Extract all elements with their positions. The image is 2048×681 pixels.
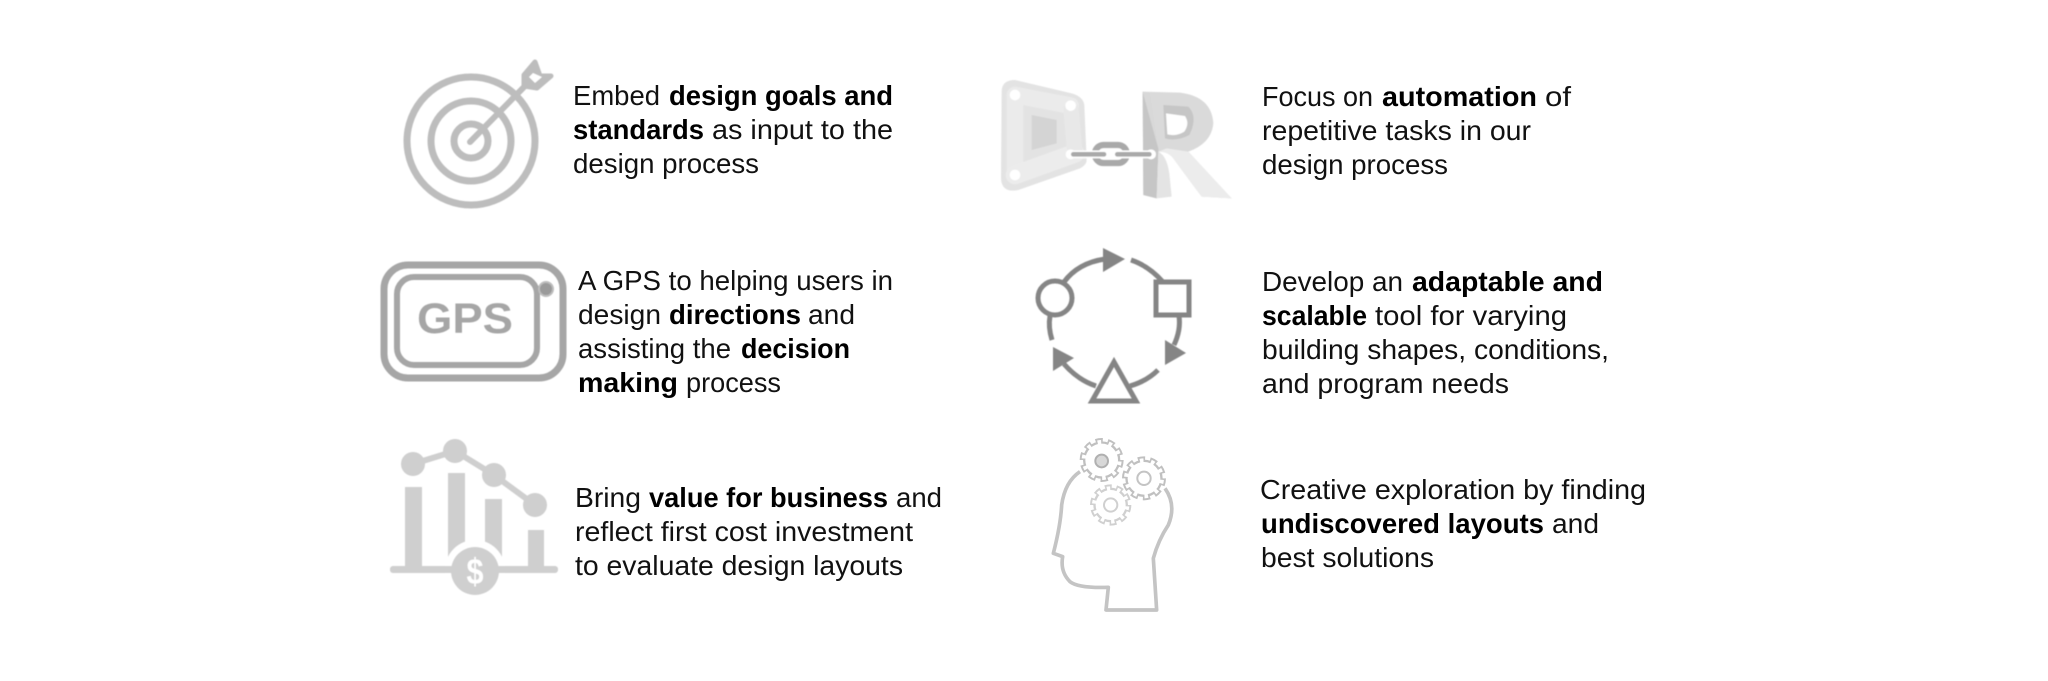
icon: head with gears [1053, 440, 1172, 610]
text: adaptable tool: adaptable and [1412, 266, 1603, 297]
text: adaptable tool: building shapes, conditions, [1262, 334, 1609, 365]
text: design goals: design process [573, 148, 759, 179]
panel: design goals [407, 62, 893, 205]
text: design goals: as input to the [712, 114, 893, 145]
text: design goals [573, 80, 893, 179]
text: adaptable tool [1262, 266, 1609, 399]
text: automation: design process [1262, 149, 1448, 180]
text: business value: and [896, 482, 942, 513]
icon part: right gear [1124, 458, 1164, 498]
text: creative exploration: and [1552, 508, 1599, 539]
text: GPS directions: directions [669, 299, 801, 330]
icon: GPS device [384, 265, 563, 378]
text: business value: to evaluate design layouts [575, 550, 903, 581]
panel: business value [390, 439, 942, 600]
icon part: Dynamo shape [1001, 80, 1087, 191]
text: creative exploration: best solutions [1261, 542, 1434, 573]
text: design goals: standards [573, 114, 704, 145]
text: creative exploration [1260, 474, 1646, 573]
text: adaptable tool: and program needs [1262, 368, 1509, 399]
text: design goals: Embed [573, 80, 660, 111]
text: automation: Focus on [1262, 81, 1373, 112]
text: GPS directions: process [686, 367, 781, 398]
icon part: Revit R [1143, 92, 1232, 198]
text: adaptable tool: scalable [1262, 300, 1367, 331]
icon part: chain link [1066, 145, 1156, 163]
text: creative exploration: Creative exploration by finding [1260, 474, 1646, 505]
text: automation: automation [1382, 81, 1537, 112]
text: business value: reflect first cost investment [575, 516, 913, 547]
icon part: top gear [1082, 440, 1122, 480]
text: adaptable tool: tool for varying [1375, 300, 1567, 331]
icon: GPS device: GPS [417, 295, 513, 343]
text: GPS directions: and [808, 299, 855, 330]
text: business value: Bring [575, 482, 641, 513]
text: business value: value for business [649, 482, 888, 513]
icon: cost chart with dollar coin [390, 439, 558, 600]
text: creative exploration: undiscovered layouts [1261, 508, 1544, 539]
text: GPS directions: decision [741, 333, 850, 364]
text: automation: repetitive tasks in our [1262, 115, 1531, 146]
panel: automation [1001, 80, 1571, 198]
text: GPS directions: design [578, 299, 661, 330]
text: business value [575, 482, 942, 581]
panel: adaptable tool [1038, 248, 1609, 401]
icon: cycle of shapes [1038, 248, 1189, 401]
text: design goals: design goals and [669, 80, 893, 111]
panel: GPS directions [384, 265, 893, 398]
text: GPS directions: A GPS to helping users in [578, 265, 893, 296]
text: GPS directions [578, 265, 893, 398]
text: adaptable tool: Develop an [1262, 266, 1403, 297]
text: GPS directions: assisting the [578, 333, 731, 364]
text: GPS directions: making [578, 367, 678, 398]
text: automation: of [1545, 81, 1571, 112]
icon: cost chart with dollar coin: $ [466, 551, 484, 592]
icon part: lower gear [1092, 486, 1129, 524]
icon: Dynamo linked to Revit [1001, 80, 1232, 198]
panel: creative exploration [1053, 440, 1646, 610]
text: automation [1262, 81, 1571, 180]
icon: target with arrow [407, 62, 551, 205]
